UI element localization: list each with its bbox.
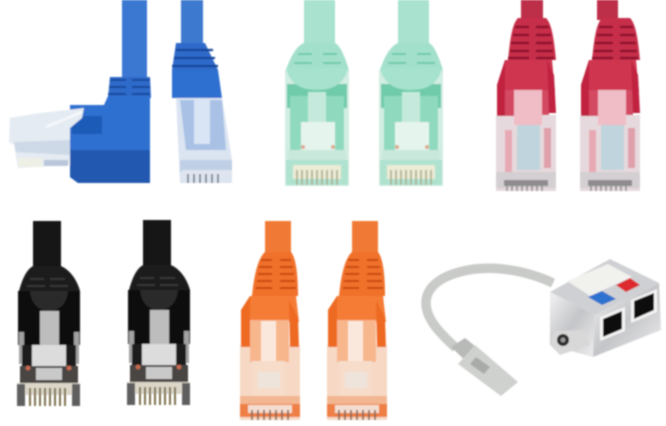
port right frame <box>631 289 657 323</box>
splitter top face <box>550 259 659 315</box>
connector: red plug right <box>580 0 640 191</box>
cable <box>426 268 553 348</box>
connector: aqua plug right <box>379 0 443 186</box>
port left <box>603 311 622 337</box>
connector: orange plug left <box>240 221 300 420</box>
connector: orange plug right <box>327 221 387 420</box>
mounting ear <box>550 330 590 355</box>
plug boot <box>451 338 480 363</box>
label plate <box>567 264 632 296</box>
splitter left face <box>550 292 595 357</box>
connector: grey cable with shielded splitter box <box>426 259 661 396</box>
connector: aqua plug left <box>285 0 349 186</box>
connector: blue straight plug <box>172 0 232 183</box>
connector: red plug left <box>496 0 556 191</box>
connector: blue right-angle plug <box>9 0 151 183</box>
port left frame <box>600 307 625 341</box>
splitter right face <box>593 283 661 357</box>
blue key <box>588 291 616 305</box>
red key <box>616 278 640 292</box>
port right <box>634 293 654 319</box>
connector: black plug right <box>127 220 190 405</box>
connector: black plug left <box>17 221 80 406</box>
plug head <box>458 345 518 396</box>
